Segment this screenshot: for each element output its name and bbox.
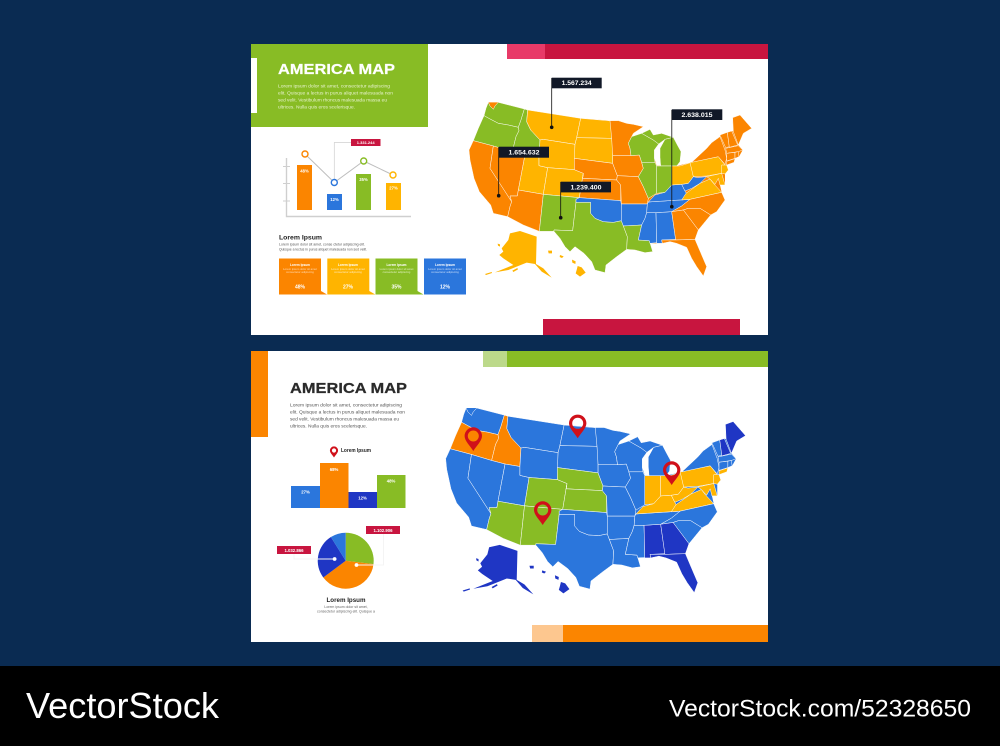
chart: bars with line overlay: 27%	[389, 186, 398, 190]
intro paragraph: sed velit. Vestibulum rhoncus malesuada massa eu	[278, 98, 387, 104]
card: 12%: consectetur adipiscing	[431, 270, 459, 274]
card: 27%: consectetur adipiscing	[334, 270, 362, 274]
bar chart legend: Lorem Ipsum	[341, 448, 372, 454]
card: 35%: Lorem ipsum dolor sit amet	[380, 267, 414, 271]
intro paragraph: ultrices. Nulla quis eros scelerisque.	[278, 104, 355, 110]
pie caption: Lorem ipsum dolor sit amet,	[324, 605, 368, 609]
watermark footer bar	[0, 666, 1000, 746]
VectorStock logo text: VectorStock	[26, 685, 220, 726]
text block: Lorem Ipsum: Lorem Ipsum	[279, 234, 322, 242]
pie caption: consectetur adipiscing elit. Quisque a	[317, 610, 375, 614]
card: 35%: 35%	[391, 284, 402, 290]
text block: Lorem Ipsum	[279, 234, 367, 252]
bar chart: 48%	[387, 478, 395, 484]
card: 35%: consectetur adipiscing	[383, 270, 411, 274]
chart: bars with line overlay	[283, 139, 411, 216]
callout: 2.638.015: 2.638.015	[682, 113, 713, 119]
card: 27%	[327, 258, 375, 294]
icon: map pin New Mexico	[534, 501, 551, 525]
pie label left: 1.032.866	[284, 548, 304, 553]
card: 12%: 12%	[440, 284, 451, 290]
pie caption	[317, 598, 375, 614]
intro paragraph: Lorem ipsum dolor sit amet, consectetur adipiscing	[278, 84, 390, 90]
image URL text: VectorStock.com/52328650	[669, 696, 971, 722]
card: 48%	[279, 258, 327, 294]
card: 12%	[424, 258, 466, 294]
bar chart: 12%	[358, 496, 367, 500]
bar chart: 68%	[330, 467, 338, 472]
intro paragraph: Lorem ipsum dolor sit amet, consectetur adipiscing	[290, 402, 402, 408]
stat cards row	[279, 258, 466, 294]
bar chart legend	[330, 446, 372, 458]
panel: top America map slide	[251, 44, 768, 335]
card: 48%: consectetur adipiscing	[286, 270, 314, 274]
card: 35%: Lorem Ipsum	[386, 263, 407, 267]
callout: 2.638.015	[670, 109, 722, 208]
pie label right: 1.102.906	[373, 528, 393, 533]
icon: map pin North Dakota	[569, 415, 586, 438]
pie caption: Lorem Ipsum	[326, 598, 366, 604]
card: 48%: Lorem ipsum dolor sit amet	[283, 267, 317, 271]
pie chart	[277, 526, 400, 589]
icon: map pin Ohio	[663, 461, 680, 485]
intro paragraph: elit. Quisque a lectus in purus aliquet malesuada non	[278, 90, 393, 96]
bar chart	[291, 463, 406, 508]
map: USA blue highlighted	[446, 408, 746, 594]
callout: 1.239.400	[559, 182, 611, 220]
intro paragraph: ultrices. Nulla quis eros scelerisque.	[290, 424, 367, 430]
chart: bars with line overlay: 35%	[359, 177, 368, 182]
intro paragraph	[290, 402, 405, 430]
chart: bars with line overlay: 12%	[330, 197, 339, 202]
chart: bars with line overlay: 48%	[300, 168, 309, 174]
panel: bottom America map slide	[251, 351, 768, 642]
callout: 1.654.632: 1.654.632	[508, 150, 540, 156]
intro paragraph	[278, 84, 393, 110]
text block: Lorem Ipsum: Quisque a lectus in purus aliquet malesuada non sed velit.	[279, 246, 367, 252]
callout: 1.654.632	[497, 147, 549, 198]
map: USA multicolour	[469, 102, 752, 278]
text block: Lorem Ipsum: Lorem ipsum dolor sit amet, conse ctetur adipiscing elit.	[279, 242, 365, 246]
intro paragraph: sed velit. Vestibulum rhoncus malesuada massa eu	[290, 416, 399, 422]
intro paragraph: elit. Quisque a lectus in purus aliquet malesuada non	[290, 410, 405, 416]
card: 48%: Lorem Ipsum	[290, 263, 310, 267]
card: 48%: 48%	[295, 284, 306, 290]
card: 27%: 27%	[343, 284, 354, 290]
card: 12%: Lorem Ipsum	[435, 263, 455, 267]
card: 27%: Lorem Ipsum	[338, 263, 358, 267]
bar chart: 27%	[301, 490, 310, 494]
header block: green title area	[251, 44, 428, 127]
icon: map pin Oregon	[465, 427, 482, 451]
card: 12%: Lorem ipsum dolor sit amet	[428, 267, 462, 271]
callout: 1.567.234	[550, 78, 602, 129]
callout: 1.239.400: 1.239.400	[570, 185, 602, 191]
card: 27%: Lorem ipsum dolor sit amet	[331, 267, 365, 271]
callout: 1.567.234: 1.567.234	[562, 81, 592, 87]
chart: bars with line overlay: 1.331.244	[357, 140, 375, 145]
card: 35%	[376, 258, 424, 294]
title: AMERICA MAP	[290, 380, 407, 397]
title: AMERICA MAP	[278, 61, 395, 78]
